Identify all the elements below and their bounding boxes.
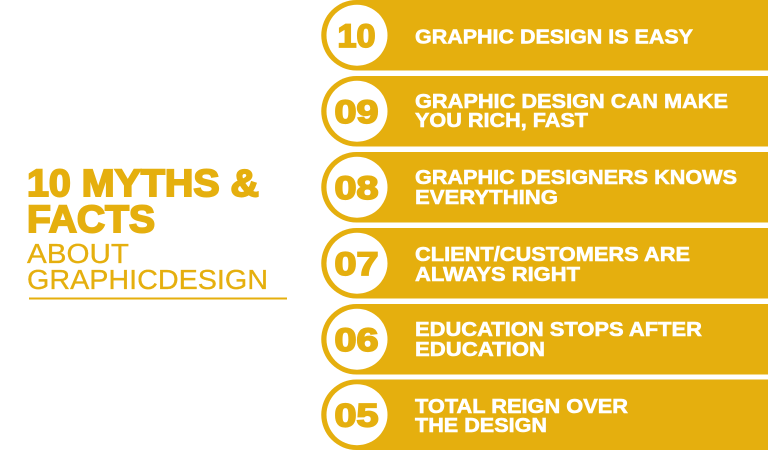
- myth row 09: GRAPHIC DESIGN CAN MAKE: [415, 90, 728, 113]
- myth row 07: ALWAYS RIGHT: [415, 263, 581, 286]
- heading: 10 myths and facts: [27, 163, 259, 241]
- myth row 07: [321, 228, 768, 298]
- myth row 09: YOU RICH, FAST: [415, 109, 588, 132]
- title block: [27, 163, 287, 300]
- myth row 09: [321, 76, 768, 146]
- myth row 06: EDUCATION: [415, 338, 545, 361]
- myth row 08: [321, 152, 768, 222]
- myth row 05: 05: [334, 398, 378, 434]
- myth row 10: 10: [338, 18, 376, 54]
- myth row 10: GRAPHIC DESIGN IS EASY: [415, 26, 693, 48]
- myth row 09: 09: [334, 94, 378, 130]
- myth row 06: [321, 304, 768, 374]
- myth row 06: EDUCATION STOPS AFTER: [415, 318, 702, 341]
- myth row 08: EVERYTHING: [415, 186, 558, 209]
- myth row 07: 07: [334, 246, 378, 282]
- myth row 08: 08: [334, 170, 378, 206]
- heading: 10 myths and facts: FACTS: [27, 199, 155, 241]
- myth row 08: GRAPHIC DESIGNERS KNOWS: [415, 166, 737, 189]
- heading: 10 myths and facts: 10 MYTHS &: [27, 163, 259, 205]
- myth row 05: THE DESIGN: [415, 414, 547, 437]
- myth row 07: CLIENT/CUSTOMERS ARE: [415, 243, 690, 266]
- subheading: about graphic design: GRAPHICDESIGN: [27, 264, 268, 295]
- subheading: about graphic design: ABOUT: [27, 238, 129, 269]
- myth row 05: TOTAL REIGN OVER: [415, 395, 628, 418]
- subheading: about graphic design: [27, 238, 268, 295]
- myth row 10: [321, 0, 768, 70]
- myth row 06: 06: [334, 322, 378, 358]
- title underline: [29, 298, 287, 300]
- myth row 05: [321, 380, 768, 450]
